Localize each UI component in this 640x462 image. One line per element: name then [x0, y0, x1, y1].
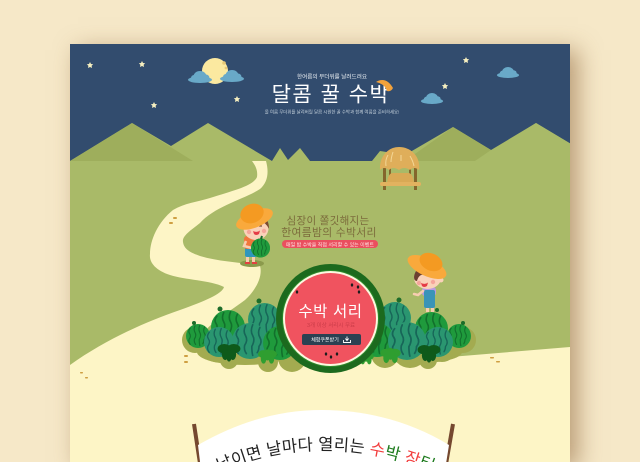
red pill caption: 매일 밤 수박을 직접 서리할 수 있는 이벤트 — [286, 241, 374, 248]
boy holding watermelon — [236, 204, 273, 267]
hut — [380, 147, 421, 190]
badge note: 3개 이상 서리시 무료 — [307, 321, 355, 329]
heading: small tagline: 한여름의 무더위를 날려드려요 — [297, 72, 367, 80]
green field — [70, 161, 570, 381]
badge flesh — [285, 273, 376, 364]
mountains — [70, 123, 570, 161]
panel: page background card — [70, 44, 570, 462]
infographic scene — [70, 57, 570, 462]
badge button: 체험쿠폰받기 — [311, 336, 339, 344]
moon with clouds — [188, 58, 244, 84]
heading: main title: 달콤 꿀 수박 — [272, 84, 390, 106]
cloud right — [421, 93, 443, 104]
boy standing on watermelons — [408, 252, 446, 312]
center text: line one: 심장이 쫄깃해지는 — [287, 214, 369, 227]
stars — [87, 57, 469, 108]
heading: description line: 올 여름 무더위를 날려버릴 달콤 시원한 꿀 수박과 함께 여름을 준비하세요! — [265, 108, 399, 116]
watermelon badge — [276, 264, 385, 373]
badge title: 수박 서리 — [298, 302, 363, 320]
cloud top right — [497, 67, 519, 78]
road pebbles — [80, 217, 500, 378]
red pill caption — [282, 240, 378, 248]
right watermelon patch — [358, 298, 476, 369]
center text: line two: 한여름밤의 수박서리 — [281, 226, 377, 239]
cream ground and winding road — [70, 161, 570, 462]
icon: watermelon slice on title — [376, 80, 393, 91]
banner poles — [194, 424, 453, 462]
left watermelon patch — [182, 298, 306, 372]
seeds — [296, 283, 360, 359]
white curved banner — [198, 410, 449, 462]
